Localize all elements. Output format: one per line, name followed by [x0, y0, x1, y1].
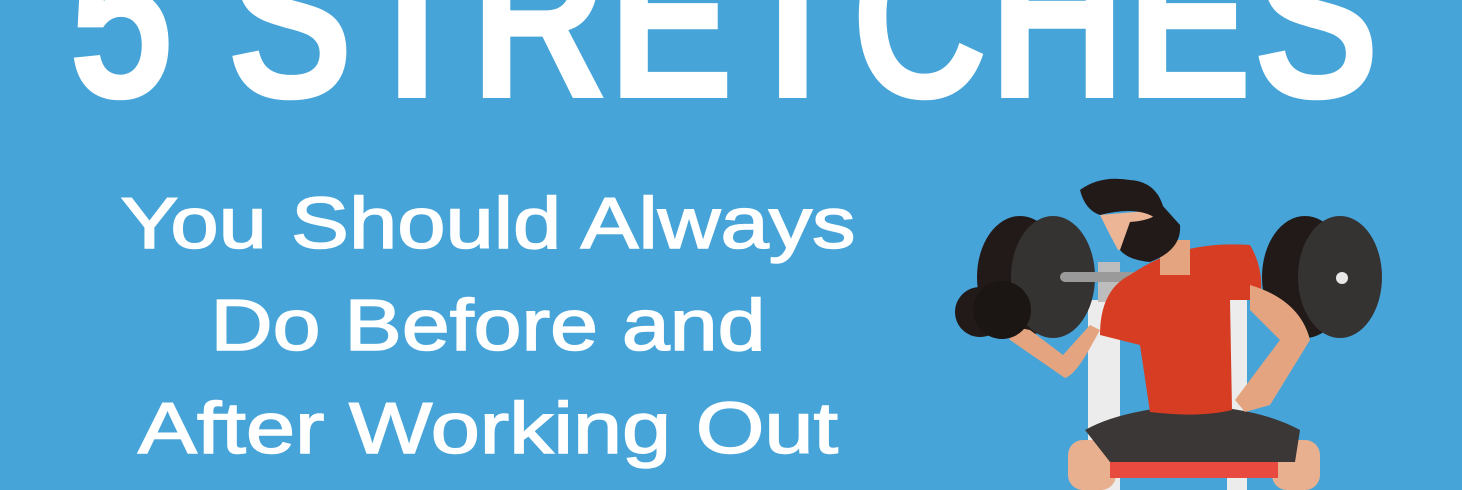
- head: [1080, 179, 1190, 275]
- torso: [1100, 244, 1261, 415]
- subtitle: [120, 184, 856, 469]
- dumbbell: [955, 281, 1031, 339]
- arms: [1005, 285, 1310, 412]
- bench uprights: [1088, 262, 1247, 490]
- subtitle: You Should Always: [120, 184, 856, 264]
- legs and seat: [1068, 405, 1320, 490]
- subtitle: After Working Out: [138, 389, 838, 469]
- barbell: [977, 216, 1382, 338]
- subtitle: Do Before and: [210, 286, 766, 366]
